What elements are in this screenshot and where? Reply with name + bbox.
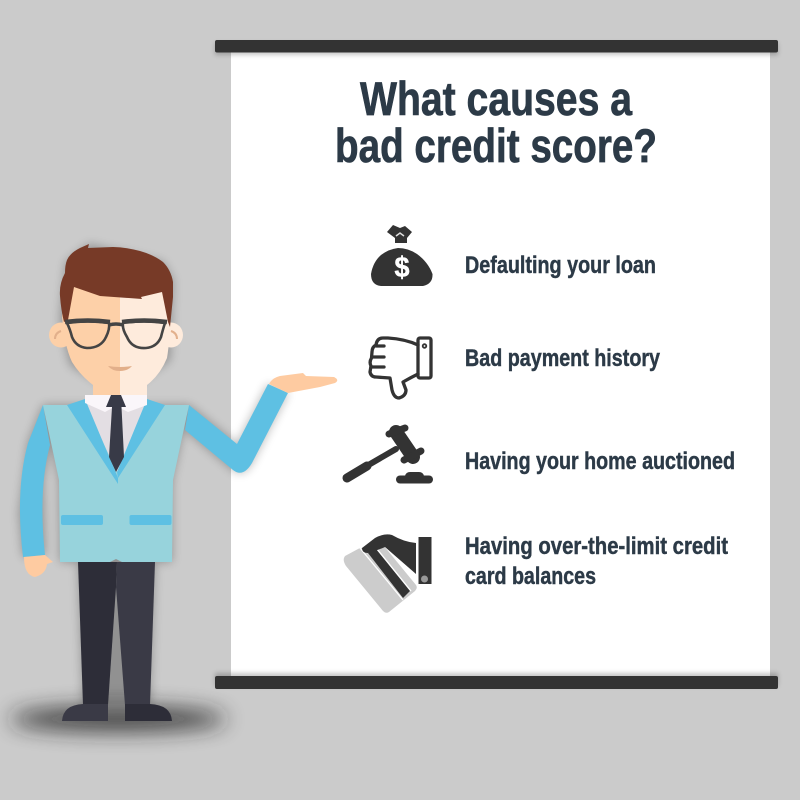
card <box>344 546 417 613</box>
title: What causes a <box>360 72 633 125</box>
sleeve <box>418 537 432 584</box>
icon: gavel <box>347 428 429 480</box>
title: bad credit score? <box>335 119 657 172</box>
label: over-the-limit balances: Having over-the-limit credit <box>465 533 728 560</box>
jacket <box>43 405 189 562</box>
character: businessman presenting <box>10 244 337 731</box>
title <box>335 72 657 172</box>
poster sheet <box>231 50 770 676</box>
collar <box>85 395 147 412</box>
legs <box>78 562 155 705</box>
hand <box>362 534 416 574</box>
soft figure shadow <box>19 244 288 705</box>
lapels <box>67 399 165 484</box>
label: defaulting your loan: Defaulting your loan <box>465 252 656 279</box>
glasses <box>65 320 167 348</box>
icon: hand holding credit card <box>344 534 432 613</box>
label: over-the-limit balances: card balances <box>465 563 596 590</box>
ground shadow <box>10 707 226 731</box>
pockets <box>61 515 172 525</box>
shirt <box>85 399 147 472</box>
hair <box>60 244 173 327</box>
bottom roller bar <box>215 676 778 689</box>
tie <box>106 395 126 472</box>
shoes <box>62 704 172 721</box>
label: over-the-limit balances <box>465 533 728 590</box>
face <box>62 280 170 392</box>
mouth <box>108 366 132 371</box>
icon: money bag <box>371 225 433 286</box>
icon: thumbs down <box>370 338 431 398</box>
label: bad payment history: Bad payment history <box>465 345 661 372</box>
left arm and hand <box>20 405 53 577</box>
ears <box>49 322 183 348</box>
panel: scroll poster <box>215 40 778 689</box>
label: having your home auctioned: Having your home auctioned <box>465 448 735 475</box>
top roller bar <box>215 40 778 52</box>
right arm and hand <box>185 373 337 473</box>
dollar sign: $ <box>394 252 410 284</box>
neck <box>93 380 147 400</box>
